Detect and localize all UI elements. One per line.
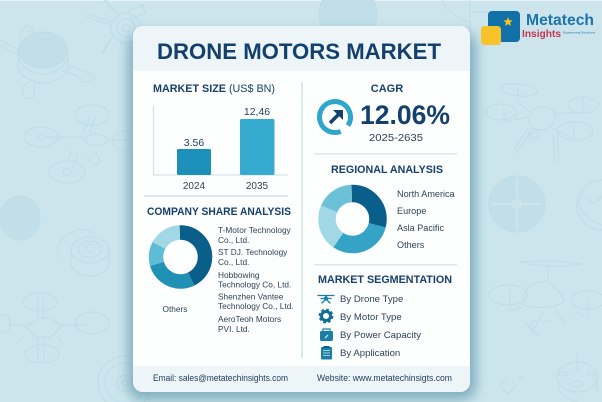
motor top left [0, 26, 95, 98]
panel: regional analysis [327, 164, 456, 250]
company legend: Hobbowing [218, 270, 260, 280]
company legend: Co., Ltd. [218, 257, 249, 267]
company legend: ST DJ. Technology [218, 247, 288, 257]
cagr heading: CAGR [371, 83, 403, 95]
chart axes [154, 106, 288, 175]
main card [133, 26, 470, 392]
right motor edge [577, 180, 602, 230]
company legend: AeroTeoh Motors [218, 314, 281, 324]
icon: clipboard [321, 346, 332, 360]
card shadow [128, 32, 476, 400]
footer band [133, 366, 470, 392]
title: DRONE MOTORS MARKET [157, 39, 441, 64]
by motor type: By Motor Type [340, 312, 402, 323]
logo blue square [488, 11, 520, 42]
company legend: T-Motor Technology [218, 225, 292, 235]
icon: growth ring arrow [315, 97, 355, 137]
dividers [144, 82, 457, 358]
regional legend [397, 189, 456, 250]
spider top [87, 0, 141, 54]
fan bottom left [0, 196, 40, 240]
panel: company share [147, 206, 294, 334]
company share heading: COMPANY SHARE ANALYSIS [147, 206, 291, 218]
bar 2024 [177, 149, 211, 175]
by application: By Application [340, 348, 400, 359]
regional legend: Others [397, 240, 425, 250]
right drone bottom [489, 261, 602, 336]
bar 2035 [240, 119, 274, 175]
company legend: Shenzhen Vantee [218, 292, 284, 302]
icon: drone [318, 296, 334, 303]
right fan [489, 176, 545, 232]
logo: Metatech Insights [481, 11, 596, 45]
company legend: PVI. Ltd. [218, 324, 250, 334]
company legend [218, 225, 294, 334]
by power capacity: By Power Capacity [340, 330, 421, 341]
label 2024: 2024 [183, 181, 206, 192]
company legend: Co., Ltd. [218, 235, 249, 245]
icon: battery case [320, 329, 333, 341]
by drone type: By Drone Type [340, 294, 403, 305]
top strip fan [129, 0, 490, 43]
company donut chart [156, 232, 205, 282]
regional donut chart [327, 194, 378, 244]
others label: Others [163, 304, 187, 314]
cagr period: 2025-2635 [369, 133, 423, 144]
logo wordmark: Metatech [526, 12, 594, 29]
label 2035: 2035 [246, 181, 269, 192]
icon: gear [320, 310, 332, 322]
email: Email: sales@metatechinsights.com [153, 373, 288, 383]
logo tagline: Engineering Decisions [563, 30, 596, 34]
panel: market segmentation [318, 274, 452, 360]
cagr value: 12.06% [360, 100, 450, 130]
panel: market size [153, 83, 288, 192]
panel: cagr [315, 83, 450, 144]
title band [133, 26, 470, 71]
regional legend: Asla Pacific [397, 223, 444, 233]
right drone top [486, 82, 598, 162]
logo star [503, 17, 513, 26]
logo subtitle: Insights [522, 28, 561, 40]
value 2035: 12,46 [244, 106, 270, 118]
company legend: Technology Co., Ltd. [218, 301, 294, 311]
value 2024: 3.56 [184, 137, 204, 149]
regional legend: North America [397, 189, 456, 199]
market size heading: MARKET SIZE (US$ BN) [153, 83, 275, 95]
rings bottom [98, 356, 152, 402]
drone bottom left [0, 293, 109, 363]
segmentation heading: MARKET SEGMENTATION [318, 274, 452, 286]
regional legend: Europe [397, 206, 426, 216]
motor bottom [57, 229, 109, 276]
bottom motor [500, 354, 597, 402]
logo yellow square [481, 26, 501, 45]
drone left [24, 105, 141, 183]
website: Website: www.metatechinsigts.com [317, 373, 452, 383]
company legend: Technology Co, Ltd. [218, 280, 291, 290]
regional heading: REGIONAL ANALYSIS [331, 164, 443, 176]
